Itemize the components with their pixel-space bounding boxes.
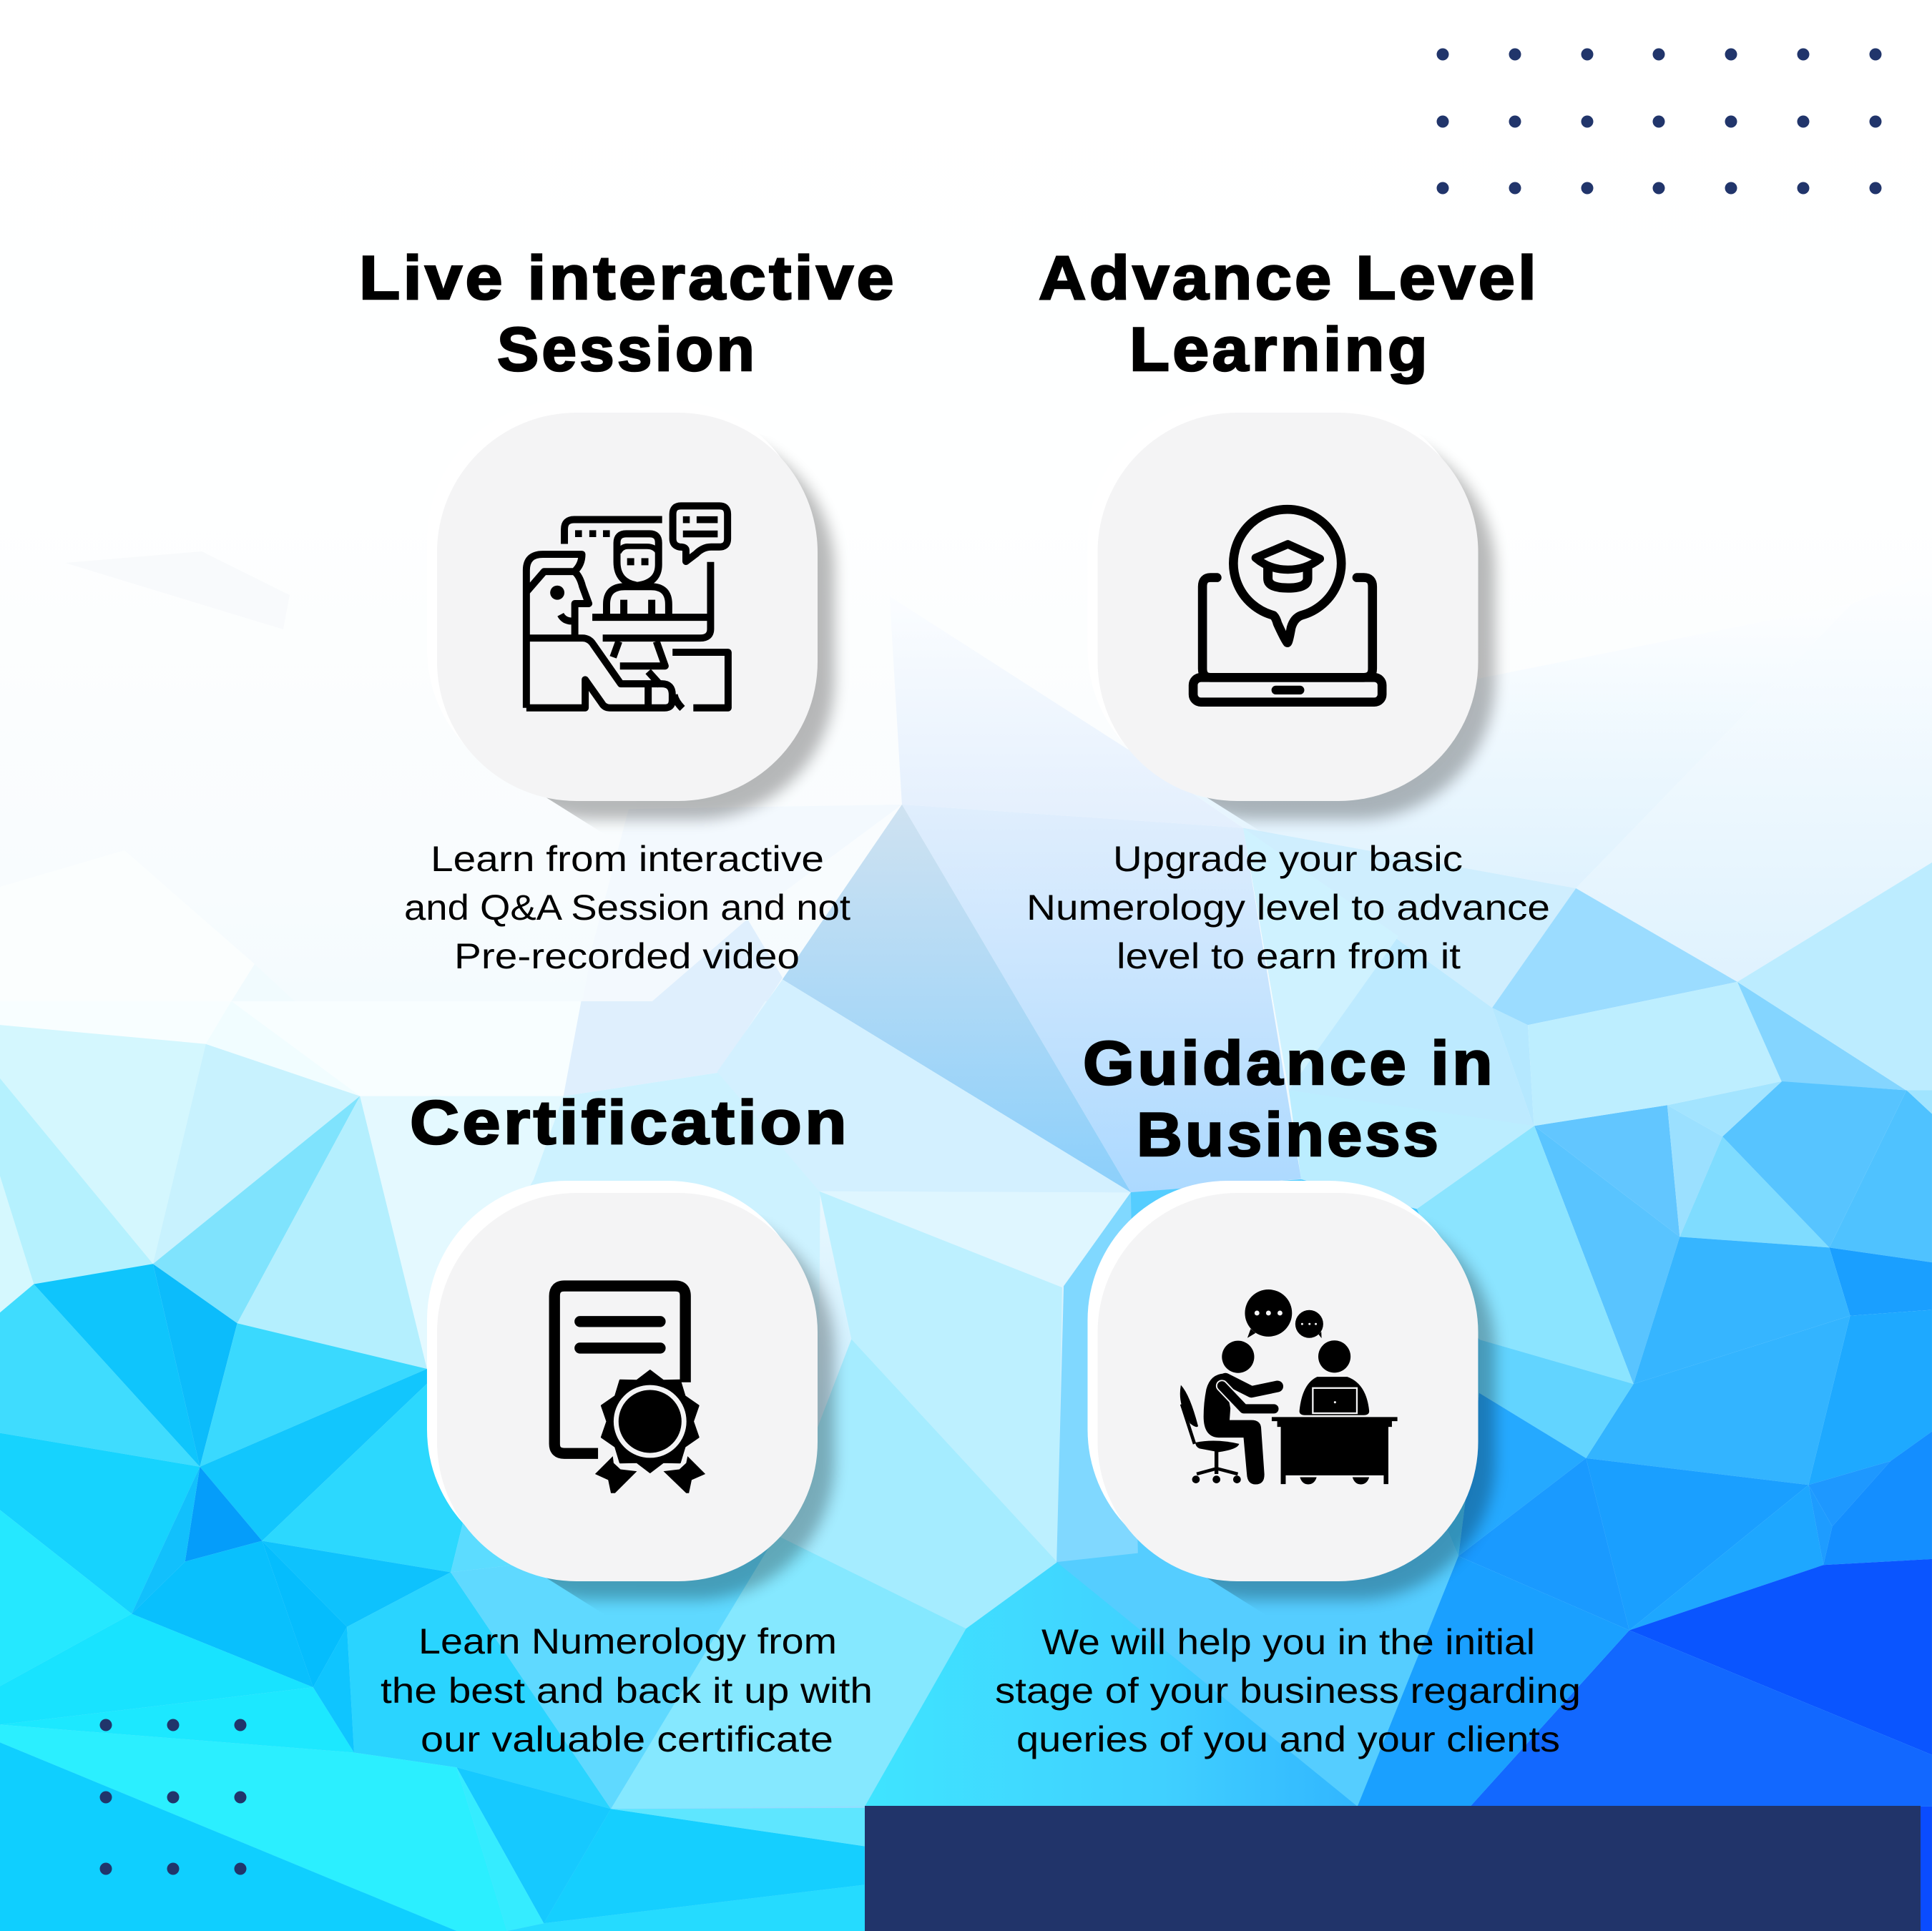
heading: guidance in business	[1083, 1029, 1496, 1169]
icon: business consultation	[1180, 1289, 1398, 1485]
heading: guidance in business: Guidance in	[1083, 1029, 1496, 1098]
heading: advance level learning: Learning	[1129, 315, 1431, 384]
description: live session: and Q&A Session and not	[404, 888, 850, 928]
dot grid: top right	[1436, 49, 1881, 195]
heading: live interactive session	[359, 244, 897, 384]
description: certification: Learn Numerology from	[418, 1621, 837, 1661]
card: advance learning	[1087, 401, 1495, 820]
description: certification	[381, 1621, 873, 1759]
panel: advance level learning	[1026, 244, 1550, 976]
description: guidance: stage of your business regarding	[995, 1671, 1581, 1711]
dot grid: bottom left	[100, 1719, 246, 1875]
panel: certification	[381, 1089, 873, 1759]
description: advance learning	[1026, 839, 1550, 976]
heading: guidance in business: Business	[1137, 1101, 1441, 1169]
panel: guidance in business	[995, 1029, 1581, 1759]
icon: laptop with graduation cap	[1193, 509, 1382, 702]
heading: advance level learning: Advance Level	[1039, 244, 1539, 313]
footer bar	[865, 1806, 1921, 1931]
description: certification: the best and back it up with	[381, 1671, 873, 1711]
description: certification: our valuable certificate	[421, 1719, 833, 1759]
description: guidance: queries of you and your clients	[1016, 1719, 1560, 1759]
description: advance learning: Upgrade your basic	[1113, 839, 1463, 879]
description: advance learning: level to earn from it	[1117, 936, 1461, 976]
description: advance learning: Numerology level to advance	[1026, 888, 1550, 928]
description: guidance: We will help you in the initial	[1041, 1622, 1535, 1662]
heading: live interactive session: Session	[497, 315, 757, 384]
heading: advance level learning	[1039, 244, 1539, 384]
card: certification	[427, 1181, 835, 1600]
card: guidance	[1087, 1181, 1495, 1600]
icon: certificate with seal	[554, 1286, 705, 1493]
panel: live interactive session	[359, 244, 897, 976]
description: guidance	[995, 1622, 1581, 1759]
description: live session: Learn from interactive	[431, 839, 824, 879]
description: live session: Pre-recorded video	[454, 936, 800, 976]
heading: certification: Certification	[410, 1089, 850, 1157]
description: live session	[404, 839, 850, 976]
card: live session	[427, 401, 835, 820]
heading: live interactive session: Live interactive	[359, 244, 897, 313]
icon: video call	[526, 506, 728, 709]
